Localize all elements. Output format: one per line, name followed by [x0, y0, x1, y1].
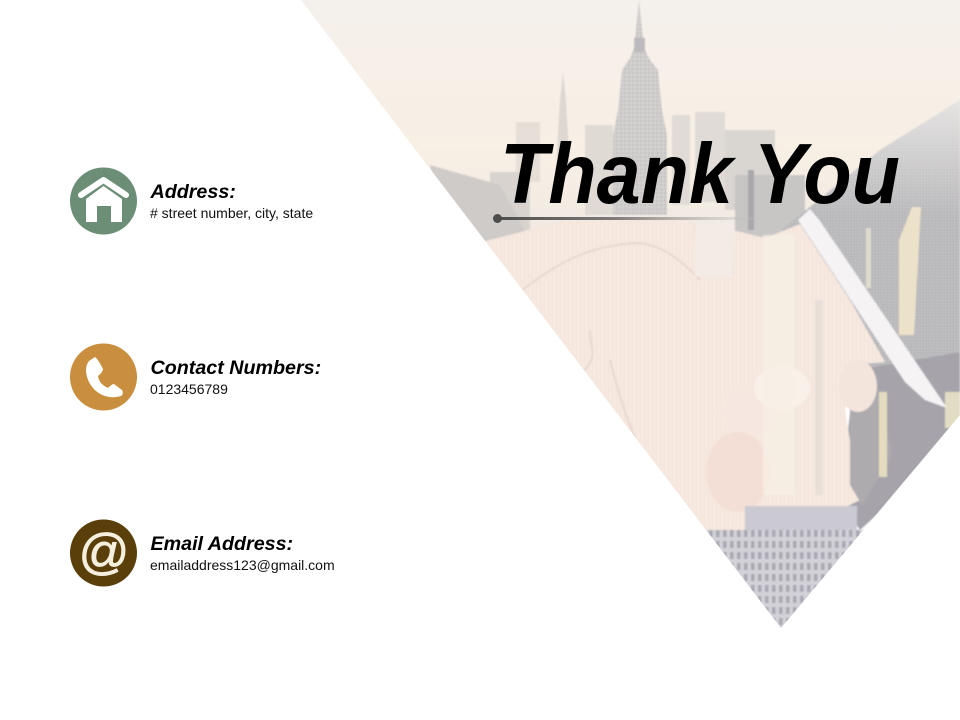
sky [295, 0, 960, 240]
right-hand city [770, 100, 960, 530]
text: street: # street number, city, state [150, 205, 313, 221]
heading: contact numbers: Contact Numbers: [150, 357, 321, 379]
heading: email address: Email Address: [150, 533, 293, 555]
thumb [845, 363, 878, 413]
one world trade tower [556, 72, 570, 170]
icon: at sign [70, 520, 137, 586]
distant skyline [430, 112, 805, 250]
icon: at sign: @ [79, 524, 129, 580]
text: email: emailaddress123@gmail.com [150, 557, 335, 573]
handshake [470, 218, 885, 540]
contact: phone [70, 344, 321, 410]
contact: email [70, 520, 335, 586]
icon: phone [70, 344, 137, 410]
photo panel: skyline and handshake [295, 0, 960, 630]
dark tower [849, 395, 878, 500]
empire state building [613, 0, 667, 215]
title underline [493, 214, 762, 223]
white cuff [798, 209, 947, 408]
text: number: 0123456789 [150, 381, 228, 397]
icon: house [70, 168, 137, 234]
lower building [700, 506, 870, 630]
heading: address: Address: [150, 181, 236, 203]
contact: address [70, 168, 313, 234]
title: Thank You [500, 127, 900, 222]
